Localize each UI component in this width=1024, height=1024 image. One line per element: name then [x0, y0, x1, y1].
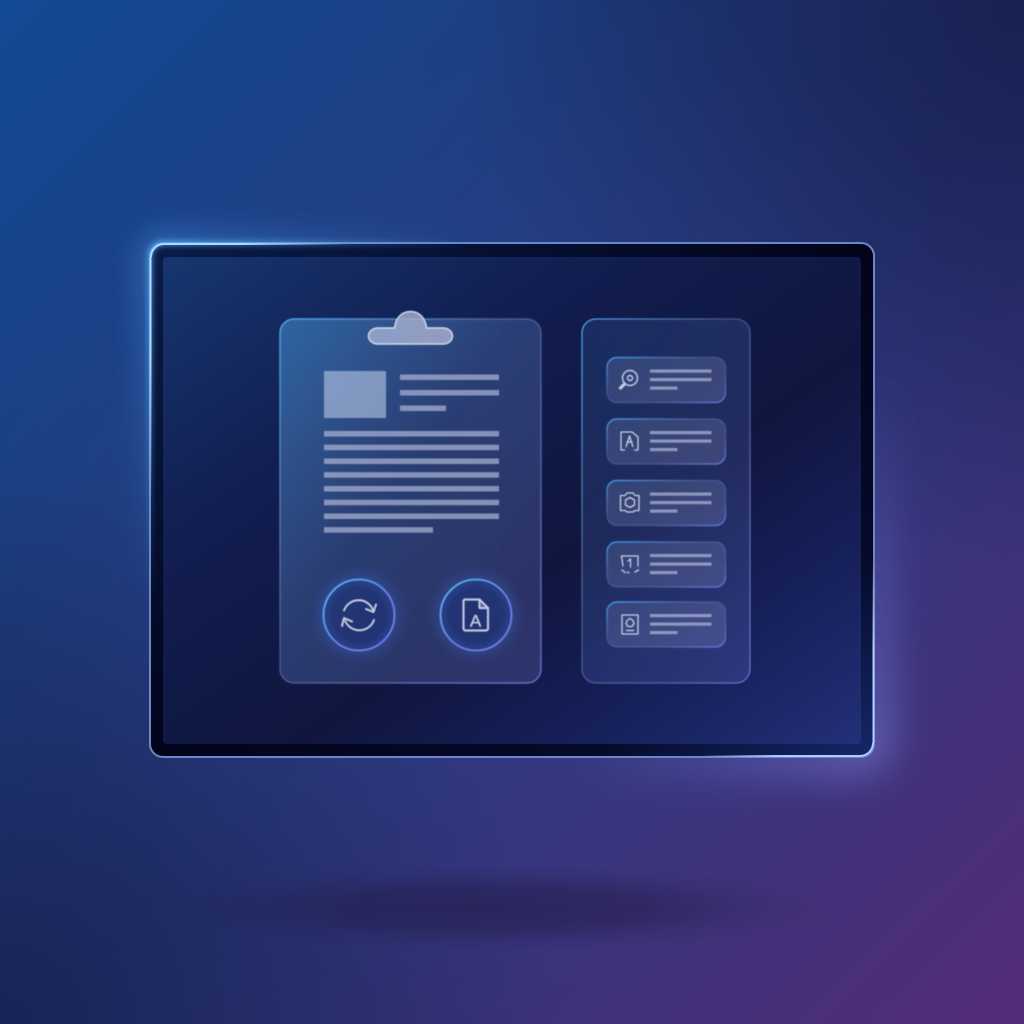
- frame bottom highlight: [700, 743, 873, 756]
- frame left highlight: [150, 257, 152, 500]
- display area: [163, 257, 861, 744]
- icon: document A button: A: [470, 612, 482, 630]
- icon: document glyph: [621, 432, 638, 450]
- screen glow: [149, 242, 875, 758]
- frame right highlight: [872, 560, 874, 743]
- card 1: search: [607, 358, 726, 402]
- sidebar sheet: [582, 319, 750, 683]
- frame highlight glow: [150, 243, 874, 757]
- heading lines: [400, 374, 499, 411]
- clipboard sheet: [280, 319, 541, 683]
- icon: camera glyph: [620, 493, 639, 512]
- bezel: [150, 243, 874, 757]
- card 5: certificate: [607, 602, 726, 647]
- card 2: document: [607, 419, 726, 464]
- image placeholder: [324, 371, 386, 418]
- floor shadow: [155, 864, 835, 952]
- panel: checklist sidebar: [582, 319, 750, 683]
- card 3: camera: [607, 480, 726, 526]
- icon: numbered sheet glyph: [622, 556, 638, 572]
- icon: magnifier: [620, 370, 638, 388]
- clipboard clip: [368, 312, 452, 344]
- panel: clipboard document: [280, 312, 541, 683]
- icon: document A button: [435, 574, 517, 656]
- icon: certificate glyph: [622, 615, 638, 634]
- body text lines: [324, 431, 499, 533]
- card 4: number document: [607, 542, 726, 587]
- frame top highlight: [151, 244, 350, 257]
- screen frame: [150, 243, 874, 757]
- icon: refresh button: [318, 574, 400, 656]
